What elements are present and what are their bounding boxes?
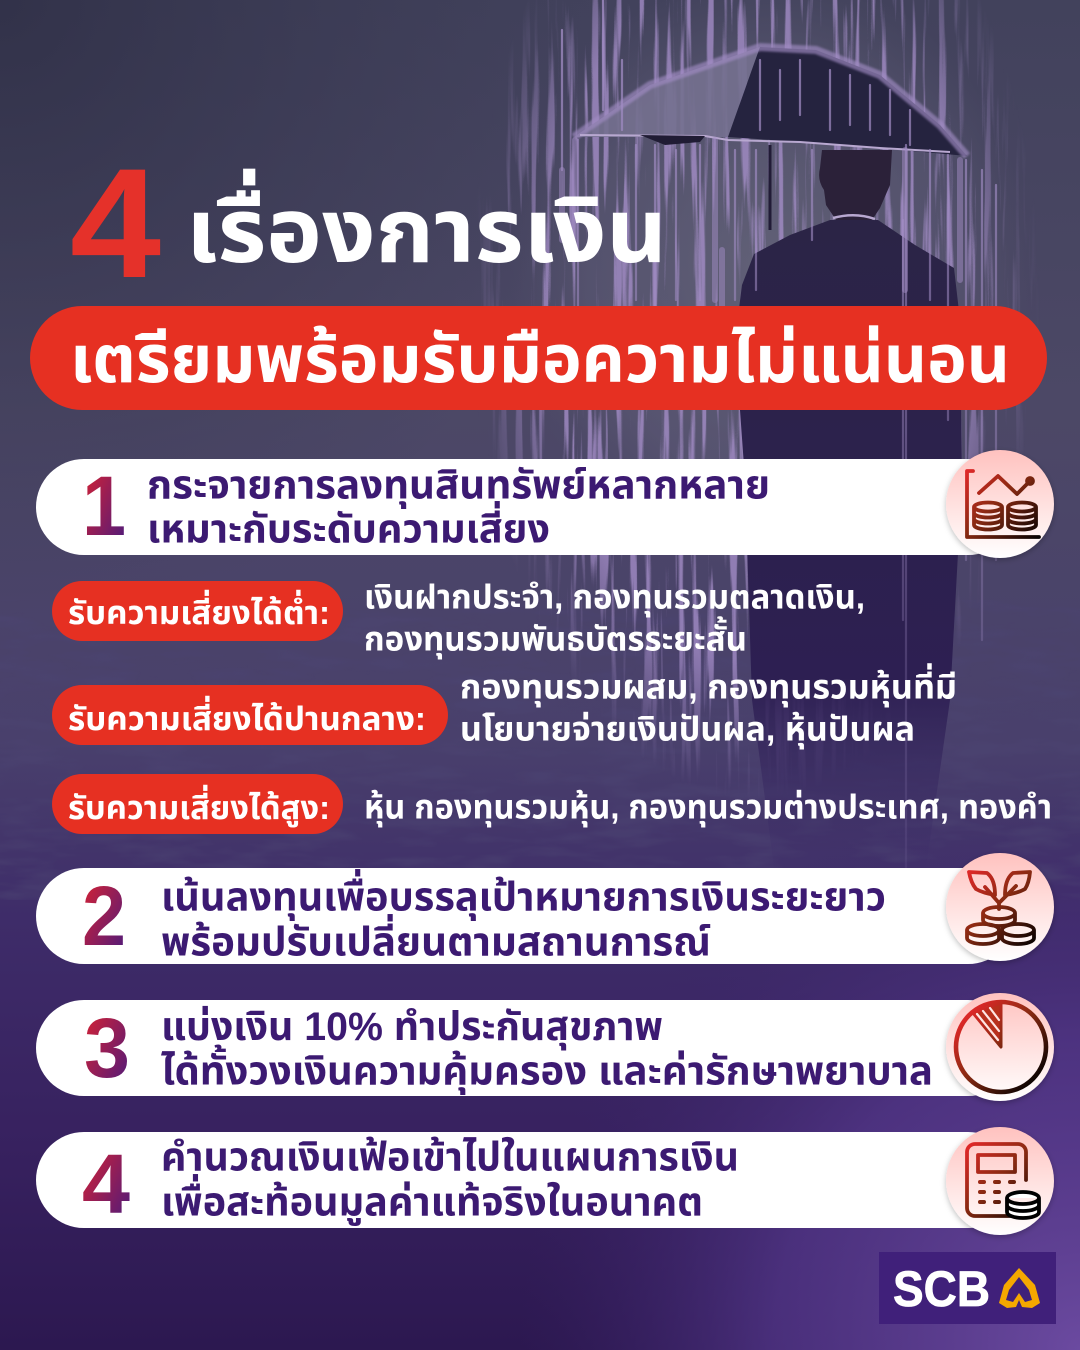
- medium risk description: [460, 662, 957, 750]
- title text: เรื่องการเงิน: [186, 168, 667, 282]
- item 2 number: 2: [82, 869, 126, 963]
- icon: plant growing from coins: [946, 853, 1054, 961]
- item 1 number: 1: [82, 459, 126, 553]
- icon: chart with coins: [946, 450, 1054, 558]
- low risk pill: [52, 581, 343, 641]
- item 3 text: ได้ทั้งวงเงินความคุ้มครอง และค่ารักษาพยาบาล: [161, 1044, 933, 1095]
- item 3 panel: [36, 1000, 1016, 1096]
- icon: calculator with coins: [946, 1127, 1054, 1235]
- high risk pill: [52, 774, 343, 834]
- item 4 text: [161, 1134, 739, 1226]
- item 1 text: กระจายการลงทุนสินทรัพย์หลากหลาย: [147, 464, 770, 510]
- medium risk pill: รับความเสี่ยงได้ปานกลาง:: [68, 695, 426, 737]
- high risk description: หุ้น กองทุนรวมหุ้น, กองทุนรวมต่างประเทศ, ทองคำ: [364, 788, 1052, 828]
- low risk description: เงินฝากประจำ, กองทุนรวมตลาดเงิน,: [364, 578, 865, 618]
- low risk description: [364, 578, 865, 660]
- icon: pie chart ten percent: [946, 993, 1054, 1101]
- medium risk description: นโยบายจ่ายเงินปันผล, หุ้นปันผล: [460, 710, 915, 750]
- low risk pill: รับความเสี่ยงได้ต่ำ:: [68, 589, 330, 631]
- SCB logo: SCB: [893, 1261, 990, 1317]
- item 4 text: คำนวณเงินเฟ้อเข้าไปในแผนการเงิน: [161, 1134, 739, 1180]
- medium risk pill: [52, 685, 448, 745]
- item 2 text: พร้อมปรับเปลี่ยนตามสถานการณ์: [161, 913, 711, 964]
- subtitle banner: [30, 306, 1047, 410]
- high risk pill: รับความเสี่ยงได้สูง:: [68, 784, 330, 828]
- title number: 4: [70, 137, 161, 311]
- icon: SCB gold bell: [999, 1268, 1040, 1308]
- item 3 text: แบ่งเงิน 10% ทำประกันสุขภาพ: [161, 1004, 663, 1051]
- item 2 text: เน้นลงทุนเพื่อบรรลุเป้าหมายการเงินระยะยาว: [161, 868, 886, 922]
- item 1 text: [147, 464, 770, 552]
- subtitle banner: เตรียมพร้อมรับมือความไม่แน่นอน: [70, 322, 1010, 397]
- title: [70, 137, 667, 311]
- item 1 text: เหมาะกับระดับความเสี่ยง: [147, 500, 550, 552]
- item 3 number: 3: [84, 1001, 130, 1095]
- item 4 text: เพื่อสะท้อนมูลค่าแท้จริงในอนาคต: [161, 1174, 703, 1226]
- item 2 text: [161, 868, 886, 964]
- medium risk description: กองทุนรวมผสม, กองทุนรวมหุ้นที่มี: [460, 662, 957, 708]
- SCB logo: [879, 1252, 1056, 1324]
- item 3 text: [161, 1004, 933, 1095]
- item 4 panel: [36, 1132, 1016, 1231]
- item 1 panel: [36, 459, 1016, 555]
- item 4 number: 4: [82, 1137, 130, 1231]
- low risk description: กองทุนรวมพันธบัตรระยะสั้น: [364, 616, 747, 660]
- item 2 panel: [36, 868, 1016, 964]
